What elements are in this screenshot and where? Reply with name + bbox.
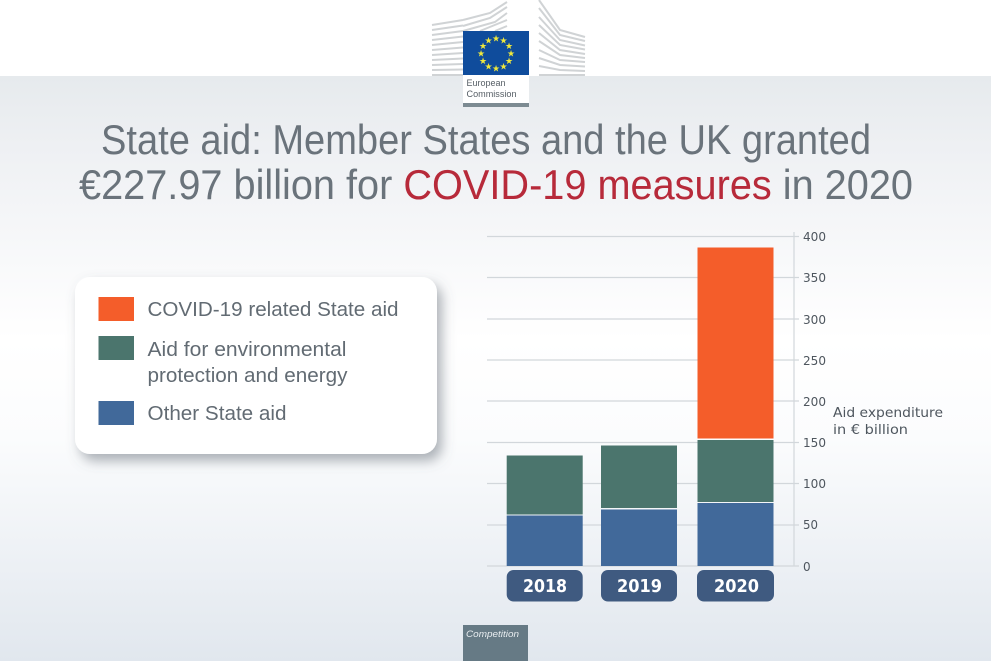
year label: 2020: 2020 bbox=[714, 576, 759, 597]
EU flag: ★ bbox=[479, 56, 487, 66]
EU flag: ★ bbox=[479, 41, 487, 51]
axis title: Aid expenditure bbox=[833, 405, 943, 421]
footer tab: Competition bbox=[463, 625, 528, 661]
title bbox=[79, 116, 913, 208]
EU flag: ★ bbox=[499, 62, 508, 72]
axis title bbox=[833, 405, 943, 438]
EU flag: ★ bbox=[505, 41, 513, 51]
year label: 2019: 2019 bbox=[617, 576, 662, 597]
EU flag: ★ bbox=[507, 48, 515, 58]
EU flag: ★ bbox=[484, 62, 493, 72]
stacked bar chart bbox=[487, 230, 943, 602]
y axis labels: 300 bbox=[803, 313, 826, 327]
legend item: Aid for environmental protection and energy: protection and energy bbox=[148, 364, 348, 387]
EU flag: ★ bbox=[505, 56, 513, 66]
gridlines and axis bbox=[487, 232, 799, 566]
year label: 2018 bbox=[507, 570, 583, 602]
footer tab: Competition: Competition bbox=[466, 629, 519, 640]
y axis labels: 50 bbox=[803, 518, 818, 532]
logo text: European bbox=[466, 78, 506, 88]
y axis labels: 200 bbox=[803, 395, 826, 409]
y axis labels: 400 bbox=[803, 230, 826, 244]
logo: European Commission bbox=[463, 31, 529, 107]
bar: 2018 bbox=[507, 456, 583, 566]
y axis labels: 100 bbox=[803, 477, 826, 491]
bar: 2019 bbox=[601, 446, 677, 566]
year label: 2020 bbox=[697, 570, 774, 602]
title: State aid: Member States and the UK granted bbox=[101, 116, 871, 163]
EU flag: ★ bbox=[492, 64, 500, 74]
y axis labels: 250 bbox=[803, 354, 826, 368]
EU flag: ★ bbox=[499, 36, 508, 46]
year label: 2018: 2018 bbox=[523, 576, 567, 597]
bar: 2020 bbox=[698, 248, 774, 566]
EU flag: ★ bbox=[484, 36, 493, 46]
logo text: Commission bbox=[466, 89, 516, 99]
legend item: Other State aid: Other State aid bbox=[148, 402, 286, 425]
panel: legend bbox=[75, 277, 437, 454]
legend item: COVID-19 related State aid: COVID-19 related State aid bbox=[148, 298, 398, 321]
y axis labels: 0 bbox=[803, 560, 811, 574]
title: €227.97 billion for COVID-19 measures in 2020 bbox=[79, 161, 913, 208]
logo text bbox=[466, 78, 516, 99]
legend item: Aid for environmental protection and energy bbox=[98, 336, 348, 387]
EU flag: ★ bbox=[477, 48, 485, 58]
legend item: Aid for environmental protection and energy: Aid for environmental bbox=[148, 338, 346, 361]
y axis labels bbox=[803, 230, 826, 574]
axis title: in € billion bbox=[833, 422, 908, 438]
year label: 2019 bbox=[601, 570, 677, 602]
EU flag: ★ bbox=[492, 34, 500, 44]
icon: Berlaymont building bbox=[432, 0, 585, 75]
y axis labels: 150 bbox=[803, 436, 826, 450]
EU flag bbox=[463, 31, 529, 75]
y axis labels: 350 bbox=[803, 271, 826, 285]
